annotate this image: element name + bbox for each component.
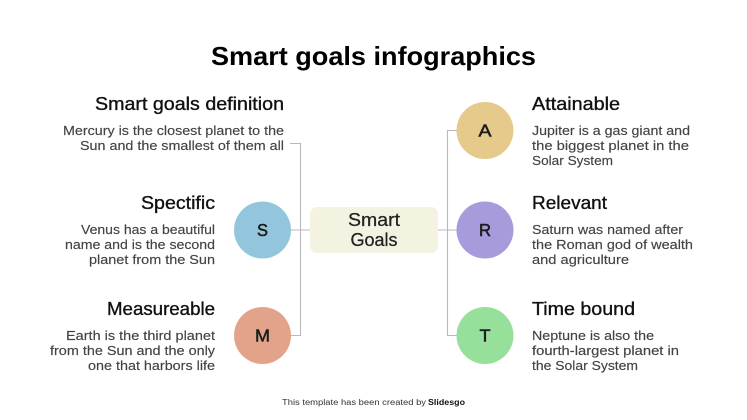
panel: attainable: Attainable	[532, 94, 620, 114]
footer credit: Slidesgo	[428, 398, 465, 407]
panel: relevant	[532, 193, 693, 267]
panel: specific: name and is the second	[65, 237, 215, 252]
panel: specific: Venus has a beautiful	[81, 222, 215, 237]
panel: relevant: the Roman god of wealth	[532, 237, 693, 252]
panel: specific	[65, 193, 215, 267]
panel: measureable: Earth is the third planet	[66, 328, 215, 343]
panel: measureable: from the Sun and the only	[50, 343, 216, 358]
panel: attainable: Jupiter is a gas giant and	[532, 123, 690, 138]
connector lines	[290, 130, 457, 336]
panel: measureable: one that harbors life	[88, 358, 215, 373]
panel: central smart goals box	[310, 207, 438, 253]
icon: R circle	[456, 202, 514, 258]
panel: attainable	[532, 94, 690, 168]
icon: T circle: T	[480, 326, 491, 346]
panel: attainable: the biggest planet in the	[532, 138, 689, 153]
footer credit	[282, 398, 465, 407]
panel: relevant: Relevant	[532, 193, 607, 213]
icon: A circle	[456, 102, 514, 159]
icon: M circle	[234, 307, 291, 364]
icon: M circle: M	[255, 326, 270, 346]
panel: smart goals definition: Sun and the smallest of them all	[80, 138, 284, 153]
panel: specific: Spectific	[141, 193, 215, 213]
panel: time bound: Neptune is also the	[532, 328, 654, 343]
panel: time bound: fourth-largest planet in	[532, 343, 679, 358]
panel: measureable	[50, 299, 216, 373]
panel: smart goals definition	[63, 94, 284, 153]
panel: relevant: and agriculture	[532, 252, 629, 267]
icon: R circle: R	[479, 220, 491, 240]
footer credit: This template has been created by	[282, 398, 426, 407]
panel: relevant: Saturn was named after	[532, 222, 684, 237]
icon: A circle: A	[478, 120, 492, 140]
icon: T circle	[456, 307, 514, 364]
panel: attainable: Solar System	[532, 153, 613, 168]
panel: time bound: Time bound	[532, 299, 635, 319]
icon: S circle	[234, 202, 291, 258]
panel: measureable: Measureable	[107, 299, 215, 319]
panel: central smart goals box: Goals	[350, 230, 398, 250]
panel: time bound	[532, 299, 679, 373]
title: Smart goals infographics	[211, 41, 536, 71]
panel: time bound: the Solar System	[532, 358, 638, 373]
panel: smart goals definition: Mercury is the closest planet to the	[63, 123, 284, 138]
panel: smart goals definition: Smart goals definition	[95, 94, 284, 114]
icon: S circle: S	[257, 220, 268, 240]
panel: central smart goals box: Smart	[348, 210, 400, 230]
panel: specific: planet from the Sun	[89, 252, 215, 267]
